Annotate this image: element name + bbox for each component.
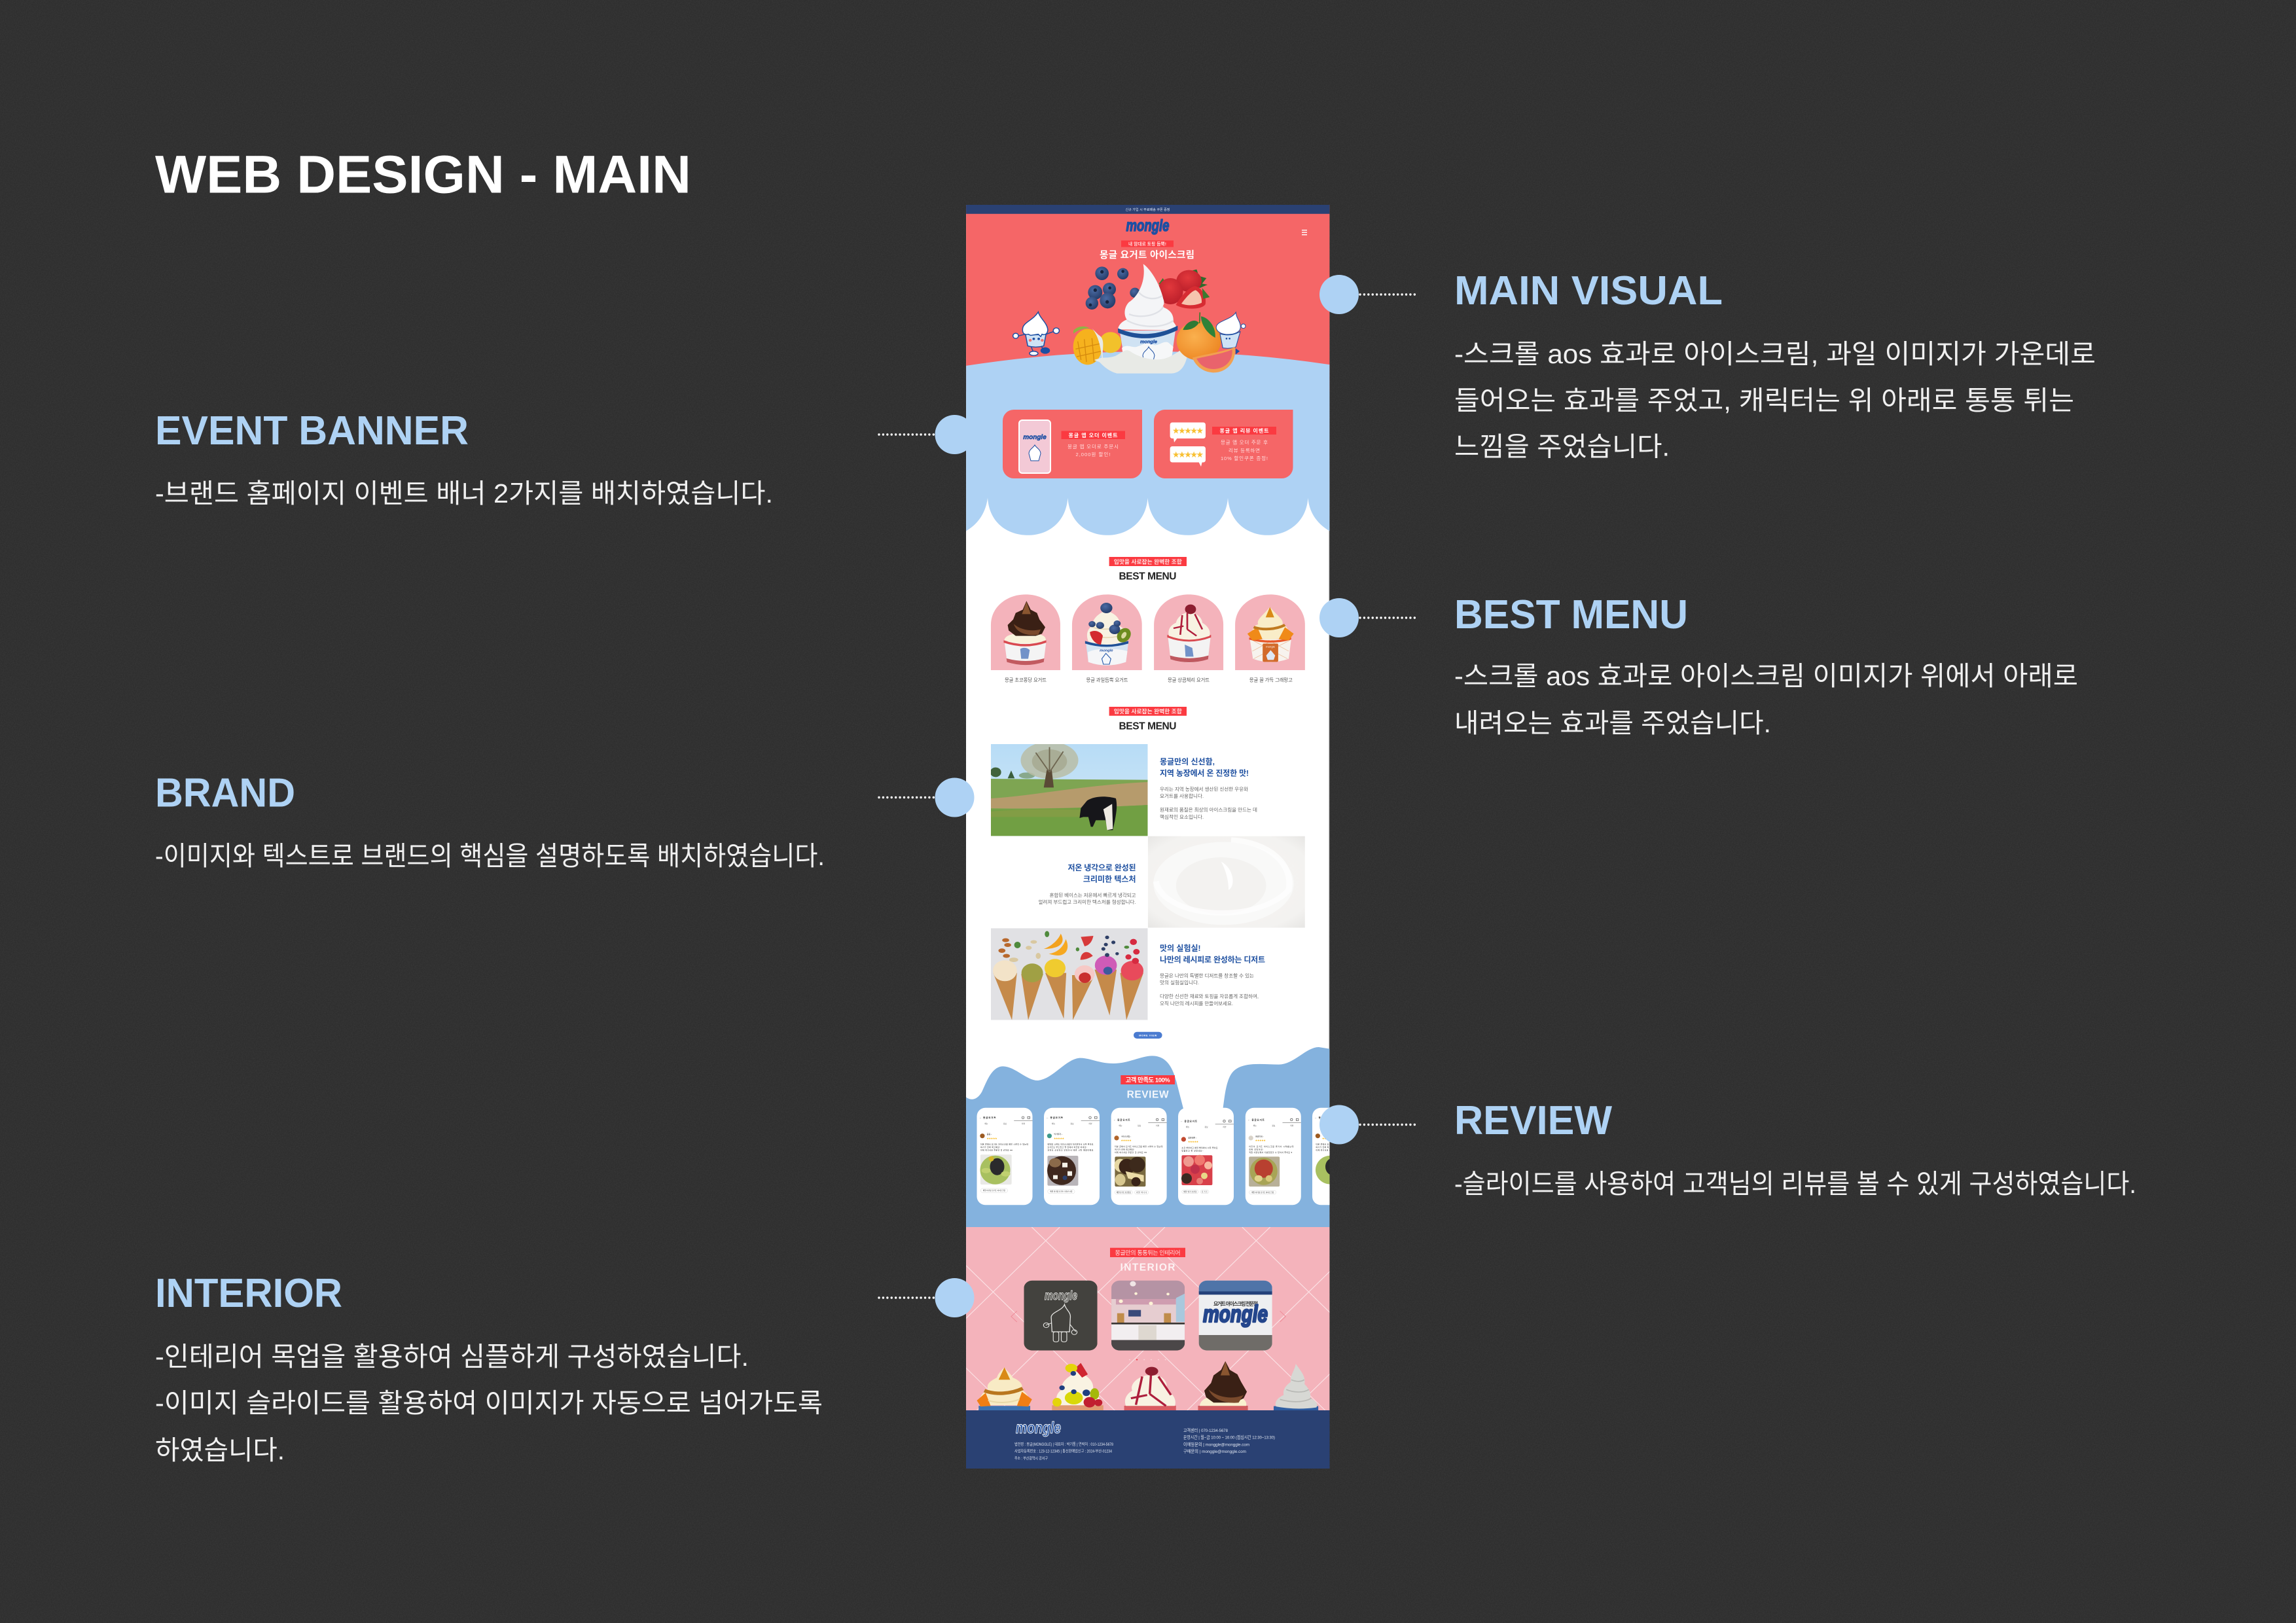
review card 3: 매일 요거트 초코퐁당 <box>1117 1191 1132 1194</box>
annotation: review: REVIEW <box>1454 1098 1612 1143</box>
review card 3: 이제 여기서만 주문할 것 같아요 ♥♥ <box>1115 1150 1147 1154</box>
menu arches and cups <box>991 594 1305 670</box>
review card 4: 요거트 <box>1202 1190 1208 1193</box>
review card 5 <box>1246 1108 1301 1205</box>
review card 5: 진짜 맛있어요! <box>1249 1147 1263 1150</box>
tag <box>1062 431 1125 439</box>
brand copy 2: 얼려져 부드럽고 크리미한 텍스처를 형성합니다. <box>1038 899 1136 905</box>
section heading: brand: BEST MENU <box>1119 721 1177 732</box>
arch 3: cherry <box>1154 594 1223 670</box>
footer contact info: 이메일문의 | monggle@monggle.com <box>1183 1441 1249 1447</box>
milk splash <box>1092 329 1209 374</box>
brand photos <box>990 741 1305 1020</box>
review card 1: 매일 아기랑 요거트 아이스크림 <box>983 1189 1006 1192</box>
review card 1: ← 몽글요거트 <box>979 1116 996 1119</box>
bottom ice cream row <box>977 1361 1318 1412</box>
right character <box>1216 312 1246 354</box>
interior gallery <box>1024 1281 1272 1351</box>
brand copy 1: 우리는 지역 농장에서 생산된 신선한 우유와 <box>1160 785 1248 792</box>
hero heading: 몽글 요거트 아이스크림 <box>1100 250 1194 260</box>
section heading: best menu: 입맛을 사로잡는 완벽한 조합 <box>1114 558 1182 565</box>
brand copy 3: 나만의 레시피로 완성하는 디저트 <box>1160 954 1265 965</box>
review card 1: 꼼꼼 › <box>987 1133 992 1135</box>
sign board text: mongle <box>1045 1289 1077 1303</box>
review card 5: 매일 아기랑 요거트 아이스크림 <box>1251 1191 1274 1194</box>
hero tag: 내 맘대로 토핑 듬뿍! <box>1128 241 1166 247</box>
sign board text: mongle <box>1203 1300 1268 1327</box>
description: 10% 할인쿠폰 증정! <box>1221 455 1268 461</box>
review card 1: 정보 <box>1003 1122 1007 1125</box>
review card 2: 메뉴 <box>1052 1122 1055 1125</box>
marker: brand <box>879 777 974 817</box>
brand copy 1: 몽글만의 신선함, <box>1160 757 1215 766</box>
brand copy 1: 요거트를 사용합니다. <box>1160 793 1204 799</box>
review card 3 <box>1111 1108 1167 1205</box>
review card 6: ← 몽글요거트 <box>1314 1116 1332 1119</box>
description: 몽글 앱 오더 주문 후 <box>1221 440 1268 445</box>
review card 1: 메뉴 <box>984 1122 988 1125</box>
review card 6: 여기가 진짜 최고예요! <box>1316 1145 1336 1149</box>
annotation: interior <box>155 1271 823 1465</box>
icon: hamburger menu <box>1302 230 1307 235</box>
footer contact info: 운영시간 | 월~금 10:00 ~ 16:00 (점심시간 12:30~13:30) <box>1183 1434 1275 1440</box>
review card 1: 여기가 진짜 최고예요! <box>980 1145 1000 1149</box>
review card 5: 메뉴 <box>1253 1124 1257 1127</box>
brand copy 2: 혼합된 베이스는 저온에서 빠르게 냉각되고 <box>1050 891 1136 898</box>
annotation: event banner <box>155 408 773 508</box>
photo: yogurt swirl <box>1148 836 1305 928</box>
review card 2 <box>1044 1108 1100 1205</box>
footer company info <box>1014 1442 1114 1461</box>
hero tag <box>1121 241 1174 247</box>
review card 5: ← 몽글요거트 <box>1247 1118 1265 1121</box>
marker: event banner <box>879 415 974 454</box>
marker: best menu <box>1319 598 1415 637</box>
review card 5: 아들이 요거트 아이스크림 별거서 시켜봤는데 <box>1249 1145 1294 1148</box>
annotation: interior: INTERIOR <box>155 1271 342 1316</box>
brand copy 2 <box>1038 863 1136 905</box>
review card 2: ← 몽글요거트 <box>1046 1116 1064 1119</box>
footer contact info <box>1183 1427 1275 1454</box>
cup <box>1120 330 1175 368</box>
review card 3: ← 몽글요거트 <box>1113 1118 1130 1121</box>
section heading: interior: INTERIOR <box>1121 1262 1175 1273</box>
review card 6: ★★★★★ <box>1322 1137 1333 1139</box>
marker: interior <box>879 1278 974 1317</box>
section heading: review: REVIEW <box>1127 1089 1169 1101</box>
annotation: main visual: -스크롤 aos 효과로 아이스크림, 과일 이미지가 가운데로 <box>1454 339 2096 369</box>
annotation: interior: 하였습니다. <box>155 1435 285 1465</box>
footer contact info: 구매문의 | monggle@monggle.com <box>1183 1448 1246 1454</box>
top notice bar text: 신규 가입 시 무료배송 쿠폰 증정 <box>1126 207 1170 212</box>
orange and leaves <box>1177 321 1221 361</box>
annotation: brand <box>155 771 825 871</box>
brand copy 1: 지역 농장에서 온 진정한 맛! <box>1160 768 1249 777</box>
footer contact info: 고객센터 | 070-1234-5678 <box>1183 1427 1228 1433</box>
review card 4: 메뉴 <box>1186 1126 1189 1128</box>
section heading: review <box>1121 1075 1175 1101</box>
marker: review <box>1319 1105 1415 1144</box>
review card 4: ★★★★★ <box>1188 1140 1199 1143</box>
review card 1: 더본 콘에서 요거트 아이스크림 매일 시켜먹 수 있는데 <box>980 1143 1028 1146</box>
icon: review speech bubbles <box>1170 423 1206 467</box>
strawberries <box>1158 270 1210 309</box>
icon: phone: mongle <box>1023 434 1047 441</box>
review card 2: ★★★★★ <box>1054 1137 1065 1139</box>
section: main visual background <box>966 205 1329 535</box>
title: WEB DESIGN - MAIN <box>155 145 691 205</box>
arch 4: mango <box>1235 594 1305 670</box>
photo: ice cream cones <box>991 928 1148 1020</box>
brand copy 3: 맛의 실험실! <box>1160 943 1201 953</box>
illustration: hero ice cream and fruit <box>1073 264 1246 374</box>
review card 2: 매일 아기랑 요거트 아이스크림 <box>1050 1190 1073 1192</box>
annotation: main visual: MAIN VISUAL <box>1454 268 1723 313</box>
review card 3: 정보 <box>1138 1124 1141 1127</box>
description <box>1221 440 1268 461</box>
button: more view <box>1134 1032 1162 1039</box>
section heading: best menu <box>1109 557 1187 582</box>
icon: review speech bubbles: ★★★★★ <box>1173 451 1204 459</box>
plain <box>1274 1364 1318 1412</box>
section heading: interior: 몽글만의 통통튀는 인테리어 <box>1115 1249 1181 1256</box>
review card 2: 정보 <box>1070 1122 1074 1125</box>
icon: phone <box>1019 420 1050 473</box>
review card 3: 더본 콘에서 요거트 아이스크림 매일 시켜먹 수 있는데 <box>1115 1145 1162 1148</box>
annotation: interior: -이미지 슬라이드를 활용하여 이미지가 자동으로 넘어가도록 <box>155 1388 823 1418</box>
annotation: review: -슬라이드를 사용하여 고객님의 리뷰를 볼 수 있게 구성하였습니다. <box>1454 1169 2136 1199</box>
section heading: interior <box>1110 1248 1185 1273</box>
brand copy 3: 오직 나만의 레시피를 만들어보세요. <box>1160 1000 1233 1007</box>
section heading: best menu: BEST MENU <box>1119 571 1177 582</box>
arch 4: mango: mongle <box>1266 645 1276 648</box>
annotation: best menu: 내려오는 효과를 주었습니다. <box>1454 708 1771 738</box>
tag: 몽글 앱 리뷰 이벤트 <box>1220 427 1269 434</box>
annotation: event banner: -브랜드 홈페이지 이벤트 배너 2가지를 배치하였습니다. <box>155 478 773 508</box>
carousel arrows and dots <box>1011 1311 1285 1361</box>
cherry <box>1124 1367 1176 1412</box>
illustration: left character <box>1013 312 1059 355</box>
review card 4 <box>1178 1108 1234 1205</box>
review card 3: 리뷰 <box>1156 1124 1160 1127</box>
review card 1 <box>977 1108 1033 1205</box>
annotation: main visual: 들어오는 효과를 주었고, 캐릭터는 위 아래로 통통 튀는 <box>1454 385 2074 416</box>
annotation: best menu: -스크롤 aos 효과로 아이스크림 이미지가 위에서 아래로 <box>1454 661 2078 691</box>
section heading: brand <box>1109 707 1187 732</box>
brand copy 2: 크리미한 텍스처 <box>1083 874 1136 883</box>
review card 6: 이제 여기서만 주문할 것 같아요 ♥♥ <box>1316 1149 1348 1152</box>
review card 2: 과일도 신선하고 맛있어서 매번 시킬 예정이예요 <box>1047 1149 1094 1152</box>
review card 2: 요거트도 부드럽고 잘 안에서 바르면 되네요! <box>1047 1145 1087 1149</box>
photo: cow in field <box>990 741 1148 836</box>
web page mockup <box>966 205 1330 1469</box>
review card 3: 여기가 진짜 최고예요! <box>1115 1147 1134 1150</box>
description: 2,000원 할인! <box>1076 451 1110 457</box>
brand copy 3: 다양한 신선한 재료와 토핑을 자유롭게 조합하여, <box>1160 993 1259 999</box>
review card 3: ★★★★★ <box>1121 1139 1132 1141</box>
review card 5: 호랑이네 › <box>1255 1134 1264 1137</box>
review card 6: 더본 콘에서 요거트 아이스크림 매일 시켜먹 수 있는데 <box>1316 1143 1364 1146</box>
review card 5: 정보 <box>1272 1124 1276 1127</box>
annotation: best menu: BEST MENU <box>1454 592 1688 637</box>
review card 2: 리뷰 <box>1088 1122 1092 1125</box>
section heading: review: 고객 만족도 100% <box>1126 1077 1170 1084</box>
footer logo: mongle <box>1016 1419 1061 1437</box>
grapefruit <box>1193 347 1235 372</box>
review card 5: 직원 사장님께서 기분전환할 수 있어서 좋아요 ♥ <box>1249 1150 1292 1154</box>
blueberries <box>1086 266 1140 310</box>
icon: review speech bubbles: ★★★★★ <box>1173 427 1204 435</box>
review card 1: ★★★★★ <box>987 1137 997 1139</box>
annotation: best menu <box>1454 592 2078 738</box>
brand copy 1: 핵심적인 요소입니다. <box>1160 813 1204 820</box>
soft serve <box>1118 264 1177 330</box>
arch 2: fruit: mongle <box>1100 649 1113 653</box>
section: review background <box>966 1047 1329 1227</box>
review card 4: 정보 <box>1204 1126 1208 1128</box>
brand copy 3: 몽글은 나만의 특별한 디저트를 창조할 수 있는 <box>1160 972 1254 979</box>
description <box>1067 444 1119 457</box>
brand copy 1: 원재료의 품질은 최상의 아이스크림을 만드는 데 <box>1160 806 1257 813</box>
review card 2: 먹거리자 › <box>1054 1132 1062 1135</box>
panel: event banner 1 <box>1003 410 1142 478</box>
section: interior background <box>821 1227 1480 1410</box>
arch 1: choco <box>991 594 1060 670</box>
section heading: brand: 입맛을 사로잡는 완벽한 조합 <box>1114 707 1182 715</box>
choco <box>1198 1361 1248 1412</box>
tag <box>1212 427 1276 435</box>
review card 4: 리뷰 <box>1223 1126 1227 1128</box>
illustration: hero ice cream and fruit: mongle <box>1140 338 1157 344</box>
footer company info: 법인명 : 몽글(MONGGLE) | 대표자 : 박기통 | 연락처 : 010-1234-5678 <box>1014 1442 1114 1447</box>
annotation: brand: BRAND <box>155 771 295 816</box>
menu captions <box>1005 677 1293 683</box>
annotation: review <box>1454 1098 2136 1199</box>
annotation: brand: -이미지와 텍스트로 브랜드의 핵심을 설명하도록 배치하였습니다. <box>155 841 825 871</box>
review card 3: 과일 바나나 <box>1136 1191 1147 1194</box>
review card 3: 구마스크림 › <box>1121 1134 1131 1137</box>
menu captions: 몽글 초코퐁당 요거트 <box>1005 677 1047 683</box>
menu captions: 몽글 과일듬뿍 요거트 <box>1086 677 1128 683</box>
annotation: interior: -인테리어 목업을 활용하여 심플하게 구성하였습니다. <box>155 1342 749 1372</box>
review card 4: 쌈윤한뿐 › <box>1188 1135 1196 1139</box>
description: 몽글 앱 오더로 주문시 <box>1067 444 1119 450</box>
sign board text: 요거트 아이스크림 전문점 <box>1213 1300 1258 1307</box>
review card 5: 리뷰 <box>1290 1124 1294 1127</box>
fruit <box>1052 1363 1103 1412</box>
brand copy 2: 저온 냉각으로 완성된 <box>1068 863 1136 872</box>
review card 3: 메뉴 <box>1119 1124 1122 1127</box>
photo: chalkboard <box>1024 1281 1098 1351</box>
review card 4: 초코 씁쓸하고 매일 빨리와서 너무 좋아요 <box>1181 1146 1218 1149</box>
annotation: event banner: EVENT BANNER <box>155 408 469 454</box>
sign board text <box>1045 1289 1268 1327</box>
annotation: main visual: 느낌을 주었습니다. <box>1454 432 1670 462</box>
panel: event banner 2 <box>1154 410 1293 478</box>
footer <box>966 1410 1330 1469</box>
review card 1: 이제 여기서만 주문할 것 같아요 ♥♥ <box>980 1149 1013 1152</box>
footer company info: 주소 : 부산광역시 강서구 <box>1014 1455 1048 1461</box>
photo: store interior <box>1111 1281 1185 1351</box>
menu captions: 몽글 상큼체리 요거트 <box>1168 677 1210 683</box>
tag: 몽글 앱 오더 이벤트 <box>1068 432 1118 438</box>
review card 1: 리뷰 <box>1022 1122 1025 1125</box>
description: 리뷰 등록하면 <box>1229 447 1260 454</box>
brand copy 1 <box>1160 757 1257 820</box>
review card 4: 달콤하고 잘 맛있네요~ <box>1181 1149 1204 1152</box>
review card 4: 매일 딸기 초콜릿 <box>1183 1190 1197 1193</box>
brand copy 3 <box>1160 943 1265 1007</box>
review card 4: ← 몽글요거트 <box>1181 1120 1198 1123</box>
brand copy 3: 맛의 실험실입니다. <box>1160 979 1199 986</box>
button: more view: MORE VIEW <box>1139 1034 1157 1037</box>
logo: mongle <box>1126 217 1170 235</box>
marker: main visual <box>1319 275 1415 314</box>
mango <box>1100 332 1121 353</box>
review card 2: 매일밤 시켜도 아이스크림이 녹지않아서 너무 좋아요. <box>1047 1143 1094 1146</box>
photo: sign board <box>1199 1281 1272 1351</box>
menu captions: 몽글 꿀 가득 그래망고 <box>1249 677 1293 683</box>
mango <box>977 1367 1032 1412</box>
footer company info: 사업자등록번호 : 123-12-12345 | 통신판매업신고 : 2024-부산-01234 <box>1014 1448 1113 1454</box>
review card 6 <box>1312 1108 1368 1205</box>
annotation: main visual <box>1454 268 2096 462</box>
review card 5: ★★★★★ <box>1255 1139 1266 1141</box>
arch 2: fruit <box>1072 594 1142 670</box>
